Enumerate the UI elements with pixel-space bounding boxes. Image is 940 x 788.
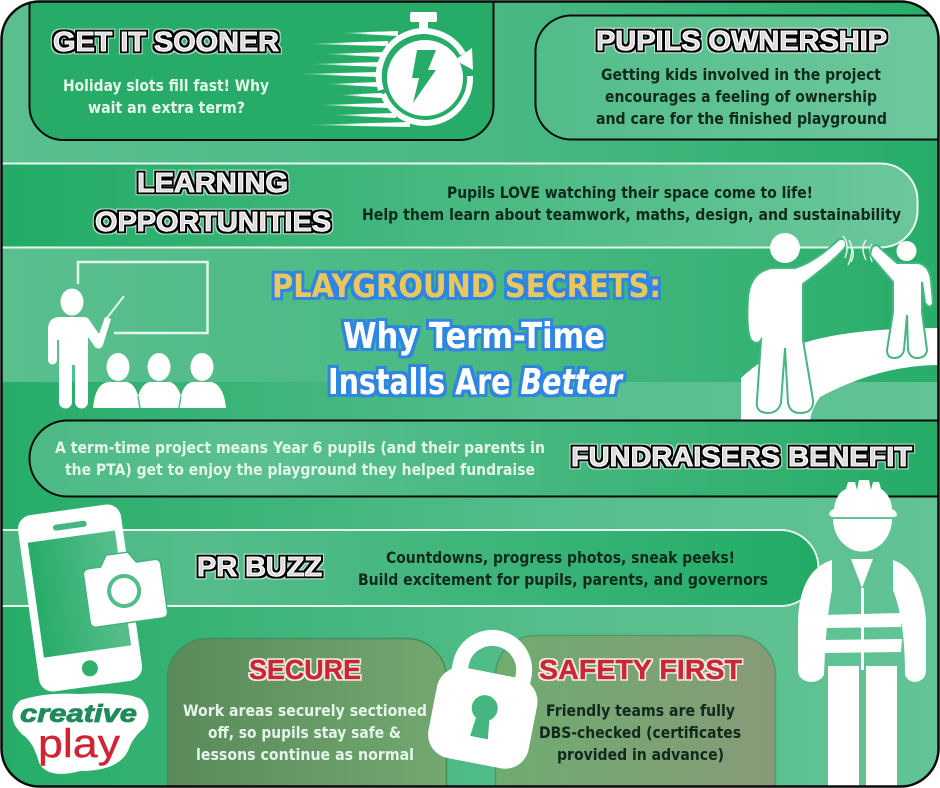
- heading: get it sooner: GET IT SOONER: [53, 26, 279, 57]
- text: learning opportunities: Pupils LOVE watching their space come to life!: [447, 183, 813, 202]
- logo: creative play: play: [38, 722, 120, 766]
- heading: learning opportunities: OPPORTUNITIES: [95, 206, 331, 237]
- text: secure: lessons continue as normal: [196, 745, 414, 764]
- icon: padlock: [424, 629, 548, 773]
- text: PR buzz: Countdowns, progress photos, sneak peeks!: [386, 548, 735, 567]
- icon: stopwatch: [297, 12, 473, 127]
- title: Installs Are Better: [328, 362, 624, 403]
- text: get it sooner: Holiday slots fill fast! Why: [63, 76, 269, 95]
- text: PR buzz: [358, 548, 768, 589]
- heading: pupils ownership: PUPILS OWNERSHIP: [596, 25, 887, 56]
- heading: safety first: SAFETY FIRST: [539, 654, 742, 685]
- icon: construction worker: [798, 480, 926, 788]
- text: fundraisers benefit: A term-time project means Year 6 pupils (and their parents in: [55, 438, 545, 457]
- heading: secure: SECURE: [249, 654, 361, 685]
- text: pupils ownership: encourages a feeling of ownership: [605, 87, 877, 106]
- heading: PR buzz: PR BUZZ: [197, 551, 322, 582]
- panel: fundraisers benefit: [30, 420, 940, 497]
- title: [272, 267, 661, 403]
- text: safety first: [539, 701, 741, 764]
- text: secure: Work areas securely sectioned: [183, 701, 427, 720]
- heading: learning opportunities: [95, 167, 331, 237]
- logo: creative play: creative: [20, 700, 137, 728]
- text: safety first: Friendly teams are fully: [546, 701, 735, 720]
- panel: learning opportunities: [0, 163, 918, 248]
- panel: get it sooner: [30, 0, 494, 140]
- panel: safety first: [495, 635, 776, 788]
- icon: teacher and pupils: [48, 262, 226, 409]
- panel: PR buzz: [0, 530, 818, 606]
- text: secure: [183, 704, 426, 760]
- text: safety first: DBS-checked (certificates: [539, 723, 741, 742]
- panel: pupils ownership: [535, 15, 940, 140]
- title: Why Term-Time: [343, 316, 605, 357]
- icon: two people and hill: [741, 233, 940, 420]
- heading: fundraisers benefit: FUNDRAISERS BENEFIT: [571, 441, 912, 472]
- heading: learning opportunities: LEARNING: [137, 167, 288, 198]
- text: PR buzz: Build excitement for pupils, parents, and governors: [358, 570, 768, 589]
- text: pupils ownership: [596, 65, 887, 128]
- text: pupils ownership: Getting kids involved in the project: [601, 65, 881, 84]
- text: learning opportunities: [362, 183, 902, 224]
- title: PLAYGROUND SECRETS:: [272, 267, 661, 305]
- panel: secure: [168, 638, 446, 788]
- text: get it sooner: wait an extra term?: [88, 98, 245, 117]
- text: fundraisers benefit: [55, 438, 545, 479]
- text: get it sooner: [64, 79, 269, 113]
- text: safety first: provided in advance): [557, 745, 724, 764]
- text: fundraisers benefit: the PTA) get to enjoy the playground they helped fundraise: [65, 460, 535, 479]
- logo: creative play: [15, 696, 146, 771]
- text: pupils ownership: and care for the finished playground: [596, 109, 887, 128]
- icon: phone with camera: [16, 503, 168, 693]
- text: secure: off, so pupils stay safe &: [208, 723, 401, 742]
